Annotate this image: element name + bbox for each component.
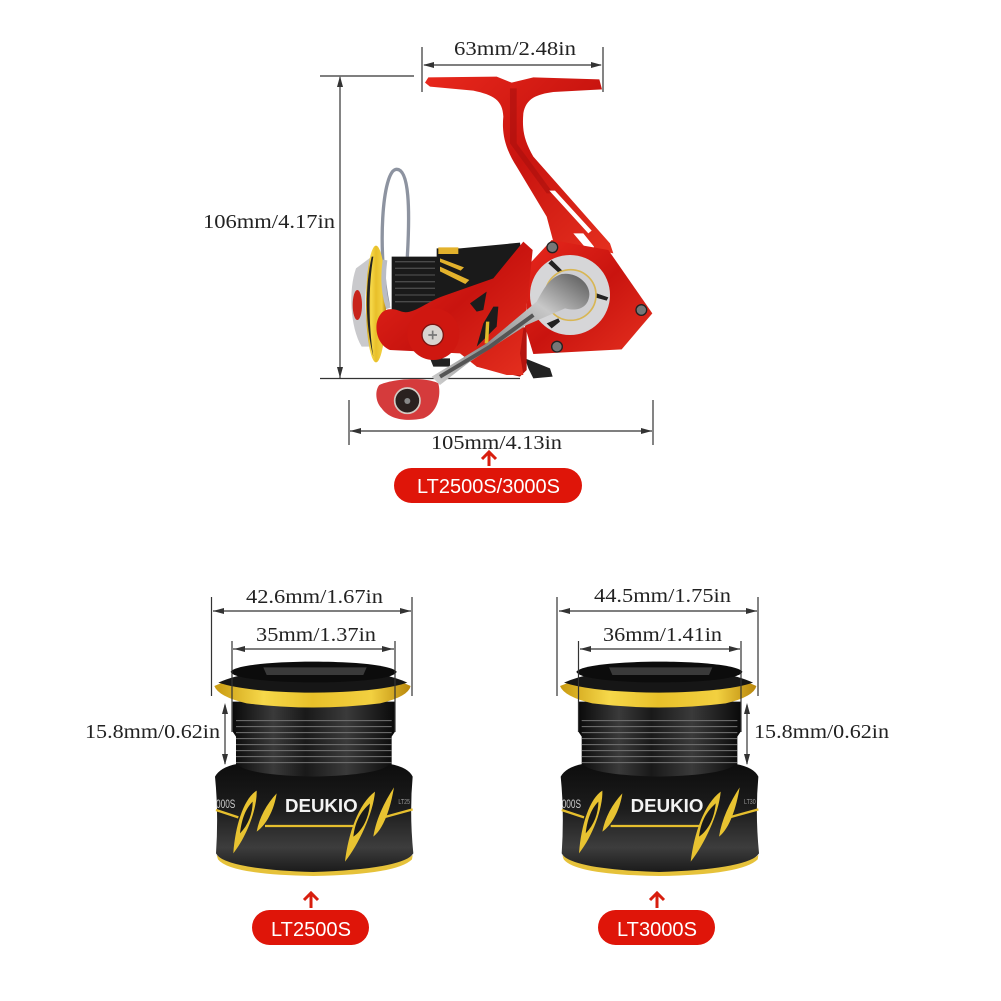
gold pinstripe	[216, 809, 413, 826]
thread ridges	[582, 721, 737, 763]
bottom gold edge	[562, 855, 758, 876]
spool cup	[576, 662, 742, 682]
label: LT2500S/3000S	[394, 468, 582, 503]
illustration: LT3000S spool	[560, 662, 759, 876]
gold rotor detail	[485, 322, 489, 343]
flange underside	[214, 671, 411, 707]
gold spikes	[233, 791, 277, 853]
cup inner highlight	[609, 667, 712, 675]
bottom gold edge	[217, 855, 413, 876]
knob cap	[395, 388, 420, 413]
frame screws	[547, 242, 647, 352]
small side mark: LT30	[744, 797, 756, 806]
dimension: handle width: 63mm/2.48in	[454, 38, 576, 60]
dimension: LT2500S inner diameter	[232, 624, 395, 732]
stem and handle bar	[425, 77, 613, 253]
gearbox body	[525, 240, 652, 354]
dimension: LT3000S outer diameter: 44.5mm/1.75in	[594, 585, 731, 607]
silver rotor disc	[530, 255, 610, 335]
second spike slot	[353, 803, 370, 837]
rotor rivet	[422, 324, 443, 346]
rear foot	[430, 358, 553, 378]
bail lower section	[384, 260, 388, 308]
bail wire	[382, 169, 409, 305]
gold spikes second pair	[691, 787, 740, 862]
arrow: reel model	[482, 452, 496, 466]
illustration: LT2500S spool	[214, 662, 413, 876]
knob centre	[404, 398, 410, 404]
dimension: reel length: 105mm/4.13in	[431, 432, 562, 454]
gold pinstripe	[562, 809, 758, 826]
gold ring	[545, 270, 596, 320]
lower frame	[463, 327, 527, 377]
spike slot	[586, 802, 598, 833]
crank arm	[432, 274, 589, 385]
model mark: 000S	[216, 797, 235, 811]
arrow: LT2500S	[304, 893, 318, 908]
rivet cross	[428, 331, 437, 339]
threaded neck	[578, 702, 741, 783]
dimension: LT2500S outer diameter	[212, 586, 412, 696]
rotor pivot	[407, 308, 459, 360]
cup inner highlight	[263, 667, 367, 675]
lower drum	[215, 764, 413, 875]
thread ridges	[236, 721, 392, 763]
reel height baseline and top reference lines	[320, 76, 520, 378]
dimension: LT2500S outer diameter: 42.6mm/1.67in	[246, 586, 383, 608]
label: LT3000S: LT3000S	[617, 918, 697, 941]
dimension: LT2500S spool height	[85, 703, 228, 765]
gold spikes second pair	[345, 787, 394, 862]
dimension: LT3000S spool height: 15.8mm/0.62in	[754, 721, 889, 743]
dimension: LT3000S spool height	[744, 703, 889, 765]
brand logo: DEUKIO	[631, 795, 703, 816]
front spool flange	[366, 246, 386, 362]
dimension: handle width	[422, 38, 603, 92]
flange underside	[560, 671, 756, 707]
label: LT2500S	[252, 910, 369, 945]
dimension: LT3000S inner diameter	[578, 624, 741, 732]
stem highlights	[510, 88, 553, 193]
spool cup	[231, 662, 397, 682]
disc black slots	[547, 260, 608, 328]
drag cap red centre	[353, 290, 362, 320]
dimension: LT3000S outer diameter	[557, 585, 758, 696]
dimension: reel length	[349, 400, 653, 454]
dimension: LT2500S inner diameter: 35mm/1.37in	[256, 624, 376, 646]
model mark: 000S	[562, 797, 581, 811]
stem cut-outs	[549, 191, 594, 255]
dimension: LT2500S spool height: 15.8mm/0.62in	[85, 721, 220, 743]
handle knob	[376, 379, 439, 420]
label: LT2500S/3000S: LT2500S/3000S	[417, 475, 560, 498]
flange top	[564, 668, 753, 693]
arrow: LT3000S	[650, 893, 664, 908]
threaded neck	[233, 702, 395, 783]
front drag cap	[351, 257, 372, 347]
label: LT2500S: LT2500S	[271, 918, 351, 941]
flange dark inner band	[367, 257, 373, 357]
crank arm shading	[440, 315, 533, 377]
dimension: reel height	[203, 76, 343, 378]
small side mark: LT25	[398, 797, 410, 806]
flange top	[218, 668, 407, 693]
illustration: spinning fishing reel	[351, 77, 652, 420]
label: LT3000S	[598, 910, 715, 945]
dimension: LT3000S inner diameter: 36mm/1.41in	[603, 624, 722, 646]
second spike slot	[699, 803, 716, 837]
gold spool accent	[438, 247, 469, 284]
gold spikes	[579, 791, 622, 853]
rotor openings	[470, 292, 498, 347]
spool line body	[392, 243, 528, 317]
brand logo: DEUKIO	[285, 795, 358, 816]
front rotor arm	[376, 242, 533, 375]
line grooves	[395, 262, 435, 302]
dimension: reel height: 106mm/4.17in	[203, 211, 335, 233]
spike slot	[240, 802, 253, 833]
lower drum	[561, 764, 759, 875]
